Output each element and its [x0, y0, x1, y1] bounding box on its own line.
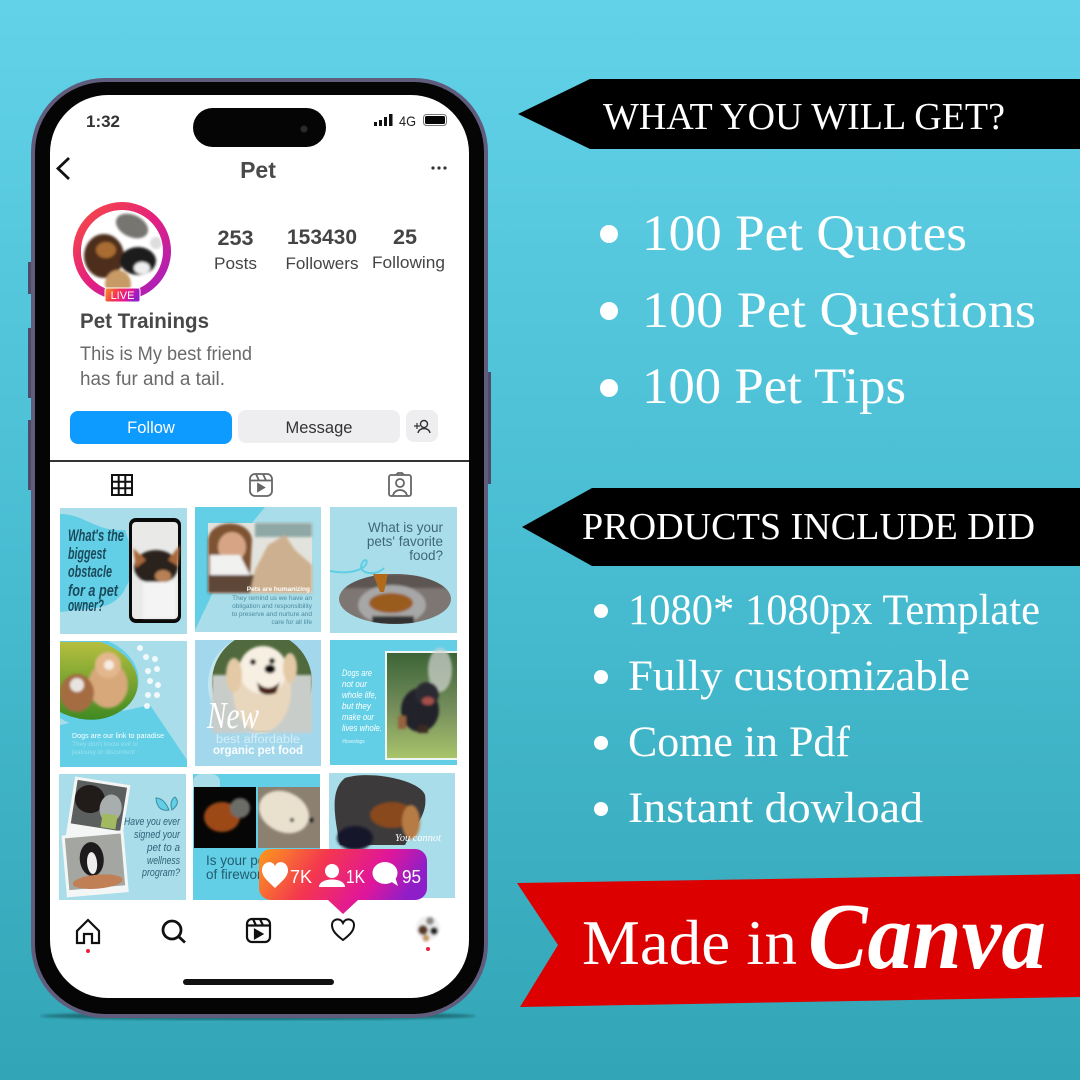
item: download: Instant dowload	[628, 785, 923, 832]
post 5 caption	[213, 734, 303, 757]
post 5 caption: organic pet food	[213, 745, 303, 757]
post 1 caption: for a pet	[68, 581, 119, 600]
profile buttons	[70, 410, 438, 444]
post 3 caption: pets' favorite	[367, 534, 443, 549]
profile bio: has fur and a tail.	[80, 369, 225, 390]
post 1 caption: biggest	[68, 544, 107, 563]
post 6 caption: make our	[342, 712, 375, 723]
post 6: running dog	[330, 640, 457, 765]
post 9: dog profile	[329, 773, 455, 898]
profile stats: 25	[393, 226, 417, 249]
LIVE badge: LIVE	[111, 290, 134, 302]
profile stats: 153430	[287, 226, 357, 249]
banner: products include: PRODUCTS INCLUDE DID	[582, 506, 1035, 548]
profile stats: Following	[372, 253, 445, 272]
post 7 caption: program?	[141, 867, 181, 879]
post 1 caption: owner?	[68, 596, 104, 615]
avatar with pets	[73, 202, 171, 302]
icon: heart	[262, 862, 288, 888]
icon: comment	[372, 862, 398, 886]
phone bezel	[35, 82, 484, 1014]
notification bubble: 1K	[346, 867, 365, 887]
post 6 caption: #lovedogs	[342, 739, 365, 745]
post 2 caption: care for all life	[272, 619, 312, 626]
post 5: golden retriever	[195, 632, 321, 766]
bottom navigation	[77, 916, 440, 953]
post 2 caption: Pets are humanizing	[247, 586, 310, 593]
profile bio: Pet Trainings	[80, 310, 209, 333]
post 2 caption: They remind us we have an	[232, 595, 312, 602]
signal bars	[374, 114, 392, 126]
back arrow	[58, 158, 69, 179]
camera dot	[300, 126, 308, 132]
post 9 caption: You cannot	[395, 833, 441, 844]
post 2 caption: to preserve and nurture and	[232, 611, 312, 618]
icon: mini avatar	[416, 916, 440, 942]
banner: what you will get: WHAT YOU WILL GET?	[603, 96, 1005, 138]
post 2: humanizing	[195, 507, 321, 632]
icon: home	[77, 920, 99, 953]
post 4: puppies	[60, 641, 187, 767]
icon: reels tab	[250, 474, 272, 496]
post 7 caption: pet to a	[146, 842, 180, 854]
item: questions: 100 Pet Questions	[642, 283, 1036, 339]
item: customizable: Fully customizable	[628, 653, 970, 700]
post 7 caption	[124, 816, 181, 879]
notification bubble	[259, 849, 427, 914]
phone screen	[50, 95, 469, 998]
post 8 caption	[206, 856, 260, 879]
post 1 caption	[68, 526, 124, 615]
list: product features	[594, 587, 1040, 832]
profile header	[58, 157, 447, 183]
banner: products include	[522, 488, 1080, 566]
icon: grid	[112, 475, 132, 495]
post 7 caption: Have you ever	[124, 816, 181, 828]
banner: what you will get	[518, 79, 1080, 149]
post 2 caption	[232, 586, 313, 626]
post 4 caption: jealousy or discontent	[71, 749, 135, 756]
phone mockup	[28, 78, 491, 1020]
message button	[238, 410, 400, 443]
phone shadow	[40, 1012, 476, 1020]
message button: Message	[286, 419, 352, 437]
post 7 caption: wellness	[147, 855, 180, 867]
post 8 caption: of fireworks?	[206, 867, 283, 882]
post 1 caption: obstacle	[68, 562, 112, 581]
icon: tagged tab	[389, 473, 411, 496]
side buttons	[28, 262, 491, 490]
item: template size: 1080* 1080px Template	[628, 587, 1040, 634]
post 6 caption: but they	[342, 701, 372, 712]
polaroid 2	[62, 830, 129, 897]
post 6 caption: whole life,	[342, 690, 377, 701]
post 3 caption: What is your	[368, 520, 443, 535]
notification bubble: 95	[402, 867, 421, 887]
post 7 caption: signed your	[134, 829, 181, 841]
status bar: 4G	[399, 113, 416, 129]
post 1: biggest obstacle	[60, 508, 187, 634]
profile header: Pet	[240, 157, 276, 183]
follow button	[70, 411, 232, 444]
phone frame	[31, 78, 488, 1018]
post 4 caption	[71, 733, 164, 756]
profile bio: This is My best friend	[80, 344, 252, 365]
post 5 caption: best affordable	[216, 734, 300, 746]
post grid	[59, 507, 457, 900]
icon: search	[163, 921, 185, 942]
post 8 caption: Is your pet afraid	[206, 853, 307, 868]
post 4 caption: Dogs are our link to paradise	[72, 733, 164, 740]
icon: heart outline	[332, 919, 354, 940]
post 3 caption	[368, 522, 443, 560]
post 6 caption: not our	[342, 679, 368, 690]
paw prints	[137, 645, 161, 709]
post 2 caption: obligation and responsibility	[232, 603, 313, 610]
ribbon: made in canva: Made in	[582, 908, 797, 978]
notification dot	[426, 947, 430, 951]
post 7: wellness	[59, 774, 186, 900]
dynamic island	[193, 108, 326, 147]
post 3: favorite food	[330, 507, 457, 633]
profile stats: Posts	[214, 254, 257, 273]
home indicator	[183, 979, 334, 985]
post 3 caption: food?	[409, 548, 443, 563]
status bar: 1:32	[86, 112, 120, 131]
notification bubble: 7K	[290, 867, 312, 887]
profile stats: 253	[218, 227, 254, 250]
profile bio	[80, 310, 252, 390]
more dots	[431, 166, 447, 170]
follow button: Follow	[127, 419, 175, 437]
post 6 caption	[342, 668, 382, 745]
add friend button	[406, 410, 438, 442]
icon: reels	[247, 919, 270, 942]
item: pdf: Come in Pdf	[628, 719, 851, 766]
icon: leaf	[156, 797, 177, 810]
post 5 script word: New	[206, 695, 259, 737]
polaroid 1	[66, 776, 130, 836]
battery	[424, 114, 446, 126]
post 6 caption: Dogs are	[342, 668, 372, 679]
item: tips: 100 Pet Tips	[642, 359, 906, 415]
tab icons	[112, 473, 411, 496]
post 8: fireworks	[193, 774, 320, 900]
icon: person	[319, 864, 345, 887]
item: quotes: 100 Pet Quotes	[642, 206, 967, 262]
post 6 caption: lives whole.	[342, 723, 382, 734]
profile stats: Followers	[286, 254, 358, 273]
ribbon: made in canva: Canva	[808, 885, 1046, 989]
post 4 caption: They don't know evil or	[72, 741, 139, 748]
list: contents	[600, 206, 1036, 415]
ribbon: made in canva	[517, 874, 1080, 1007]
post 1 caption: What's the	[68, 526, 124, 545]
profile stats	[214, 226, 445, 273]
status bar	[86, 108, 446, 147]
